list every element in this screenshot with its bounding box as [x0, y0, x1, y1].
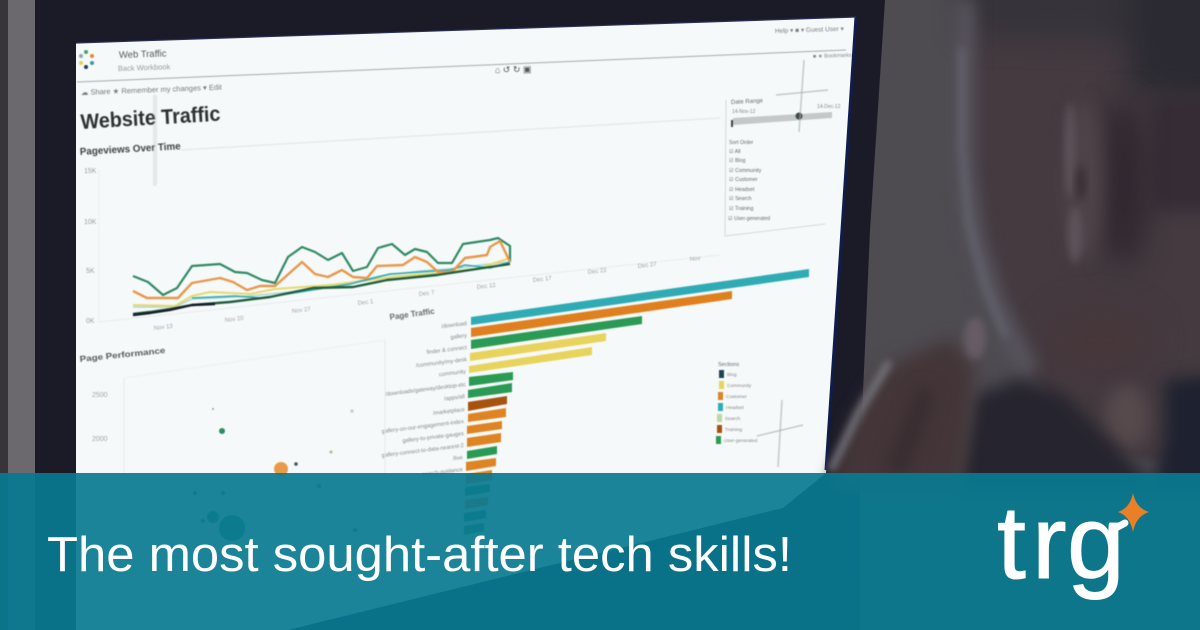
dashboard name: Web Traffic	[119, 48, 167, 61]
banner	[0, 473, 1200, 630]
bar labels: /community/my-desk	[416, 357, 467, 369]
legend: sections: Training	[725, 427, 742, 433]
x axis labels: Dec 7	[419, 290, 435, 298]
head	[960, 0, 1200, 490]
y axis labels	[84, 168, 97, 325]
scatter chart: page performance	[92, 340, 385, 630]
hand	[828, 317, 986, 490]
y axis labels: 0K	[86, 318, 95, 325]
legend: sections: Customer	[726, 394, 747, 400]
monitor screen	[76, 17, 856, 630]
icon: orange star	[1118, 493, 1149, 532]
sort order checklist: ☑ Blog	[729, 158, 746, 164]
sort order checklist: ☑ Search	[729, 196, 752, 202]
bar labels: community	[439, 369, 466, 378]
scatter points	[193, 408, 357, 541]
monitor bezel	[35, 0, 885, 630]
scatter y axis labels: 2500	[92, 392, 108, 399]
neck	[958, 378, 1160, 490]
x axis labels: Nov 20	[225, 316, 245, 324]
bar labels: gallery	[450, 333, 467, 341]
heading: Page Performance: Page Performance	[79, 345, 166, 364]
screen glare crosshairs	[155, 60, 828, 467]
bar labels: /marketplace	[433, 407, 465, 417]
heading: Pageviews Over Time: Pageviews Over Time	[80, 141, 181, 158]
scatter y axis labels	[92, 392, 108, 443]
icon: app logo	[79, 50, 94, 69]
legend: sections: User-generated	[724, 438, 758, 444]
sort order checklist: ☑ User-generated	[728, 216, 770, 222]
icon: ear	[1063, 99, 1148, 267]
x axis labels: Dec 1	[358, 299, 374, 307]
shirt reflection	[1069, 400, 1071, 473]
legend: sections	[716, 362, 758, 444]
legend: sections: Sections	[718, 362, 739, 368]
bar labels: gallery-connect-to-data-nearest-2	[381, 443, 464, 459]
x axis labels: Dec 27	[638, 262, 658, 270]
panel: filters: 14-Dec-12	[817, 104, 841, 110]
bar labels: /apps/all	[444, 394, 465, 403]
legend: sections: Blog	[727, 372, 737, 378]
title: The most sought-after tech skills!	[47, 528, 792, 582]
x axis labels: Dec 17	[533, 276, 553, 284]
sort order checklist: ☑ Training	[729, 206, 754, 212]
bar labels: search-guidance	[421, 467, 463, 478]
sort order checklist	[728, 140, 770, 222]
bar labels: gallery-on-our-engagement-index	[381, 419, 464, 435]
legend: sections: Search	[725, 416, 741, 422]
bar labels: /downloads/gateway/desktop-etc	[385, 382, 466, 398]
bar labels: finder & connect	[426, 345, 468, 356]
heading: Page Traffic: Page Traffic	[389, 307, 436, 322]
sort order checklist: ☑ Headset	[729, 187, 755, 193]
dashboard header	[77, 26, 852, 97]
bar labels	[381, 321, 468, 478]
user menu: Help ▾ ■ ▾ Guest User ▾	[775, 26, 845, 35]
sort order checklist: ☑ All	[729, 149, 741, 155]
bar labels: /download	[441, 321, 467, 330]
x axis labels: Nov 13	[154, 324, 174, 332]
bar labels: /live	[453, 455, 463, 462]
x axis labels: Nov 27	[292, 307, 312, 315]
y axis labels: 15K	[84, 168, 97, 175]
y axis labels: 10K	[84, 219, 97, 226]
scatter y axis labels: 2000	[92, 436, 108, 443]
sort order checklist: ☑ Customer	[729, 177, 758, 183]
panel: filters: 14-Nov-12	[732, 109, 756, 115]
x axis labels: Dec 12	[477, 283, 497, 291]
legend: sections: Headset	[726, 405, 745, 411]
sort order checklist: ☑ Community	[729, 168, 762, 174]
bar chart: page traffic	[381, 269, 809, 535]
breadcrumb: Back Workbook	[118, 62, 171, 73]
panel: filters	[725, 98, 841, 236]
bar labels: gallery-to-private-gauges	[402, 431, 464, 445]
person: blurred head and hand in foreground	[828, 0, 1200, 490]
series lines	[133, 238, 510, 315]
line chart: pageviews over time	[84, 118, 720, 332]
logo: trg: trg	[997, 485, 1125, 601]
sort order checklist: Sort Order	[729, 140, 753, 146]
toolbar icons: ⌂ ↺ ↻ ▣	[495, 64, 532, 75]
x axis labels: Nov	[690, 256, 701, 263]
date range label: Date Range	[731, 98, 764, 106]
head outline highlight	[962, 5, 1028, 368]
y axis labels: 5K	[86, 268, 95, 275]
x axis labels: Dec 22	[588, 268, 608, 276]
toolbar: ☁ Share ★ Remember my changes ▾ Edit	[81, 83, 223, 97]
x axis labels	[154, 256, 701, 332]
heading: Website Traffic: Website Traffic	[80, 103, 221, 134]
bookmarks: ■ ★ Bookmarks	[813, 52, 852, 60]
legend: sections: Community	[727, 383, 752, 389]
date slider	[731, 112, 832, 127]
